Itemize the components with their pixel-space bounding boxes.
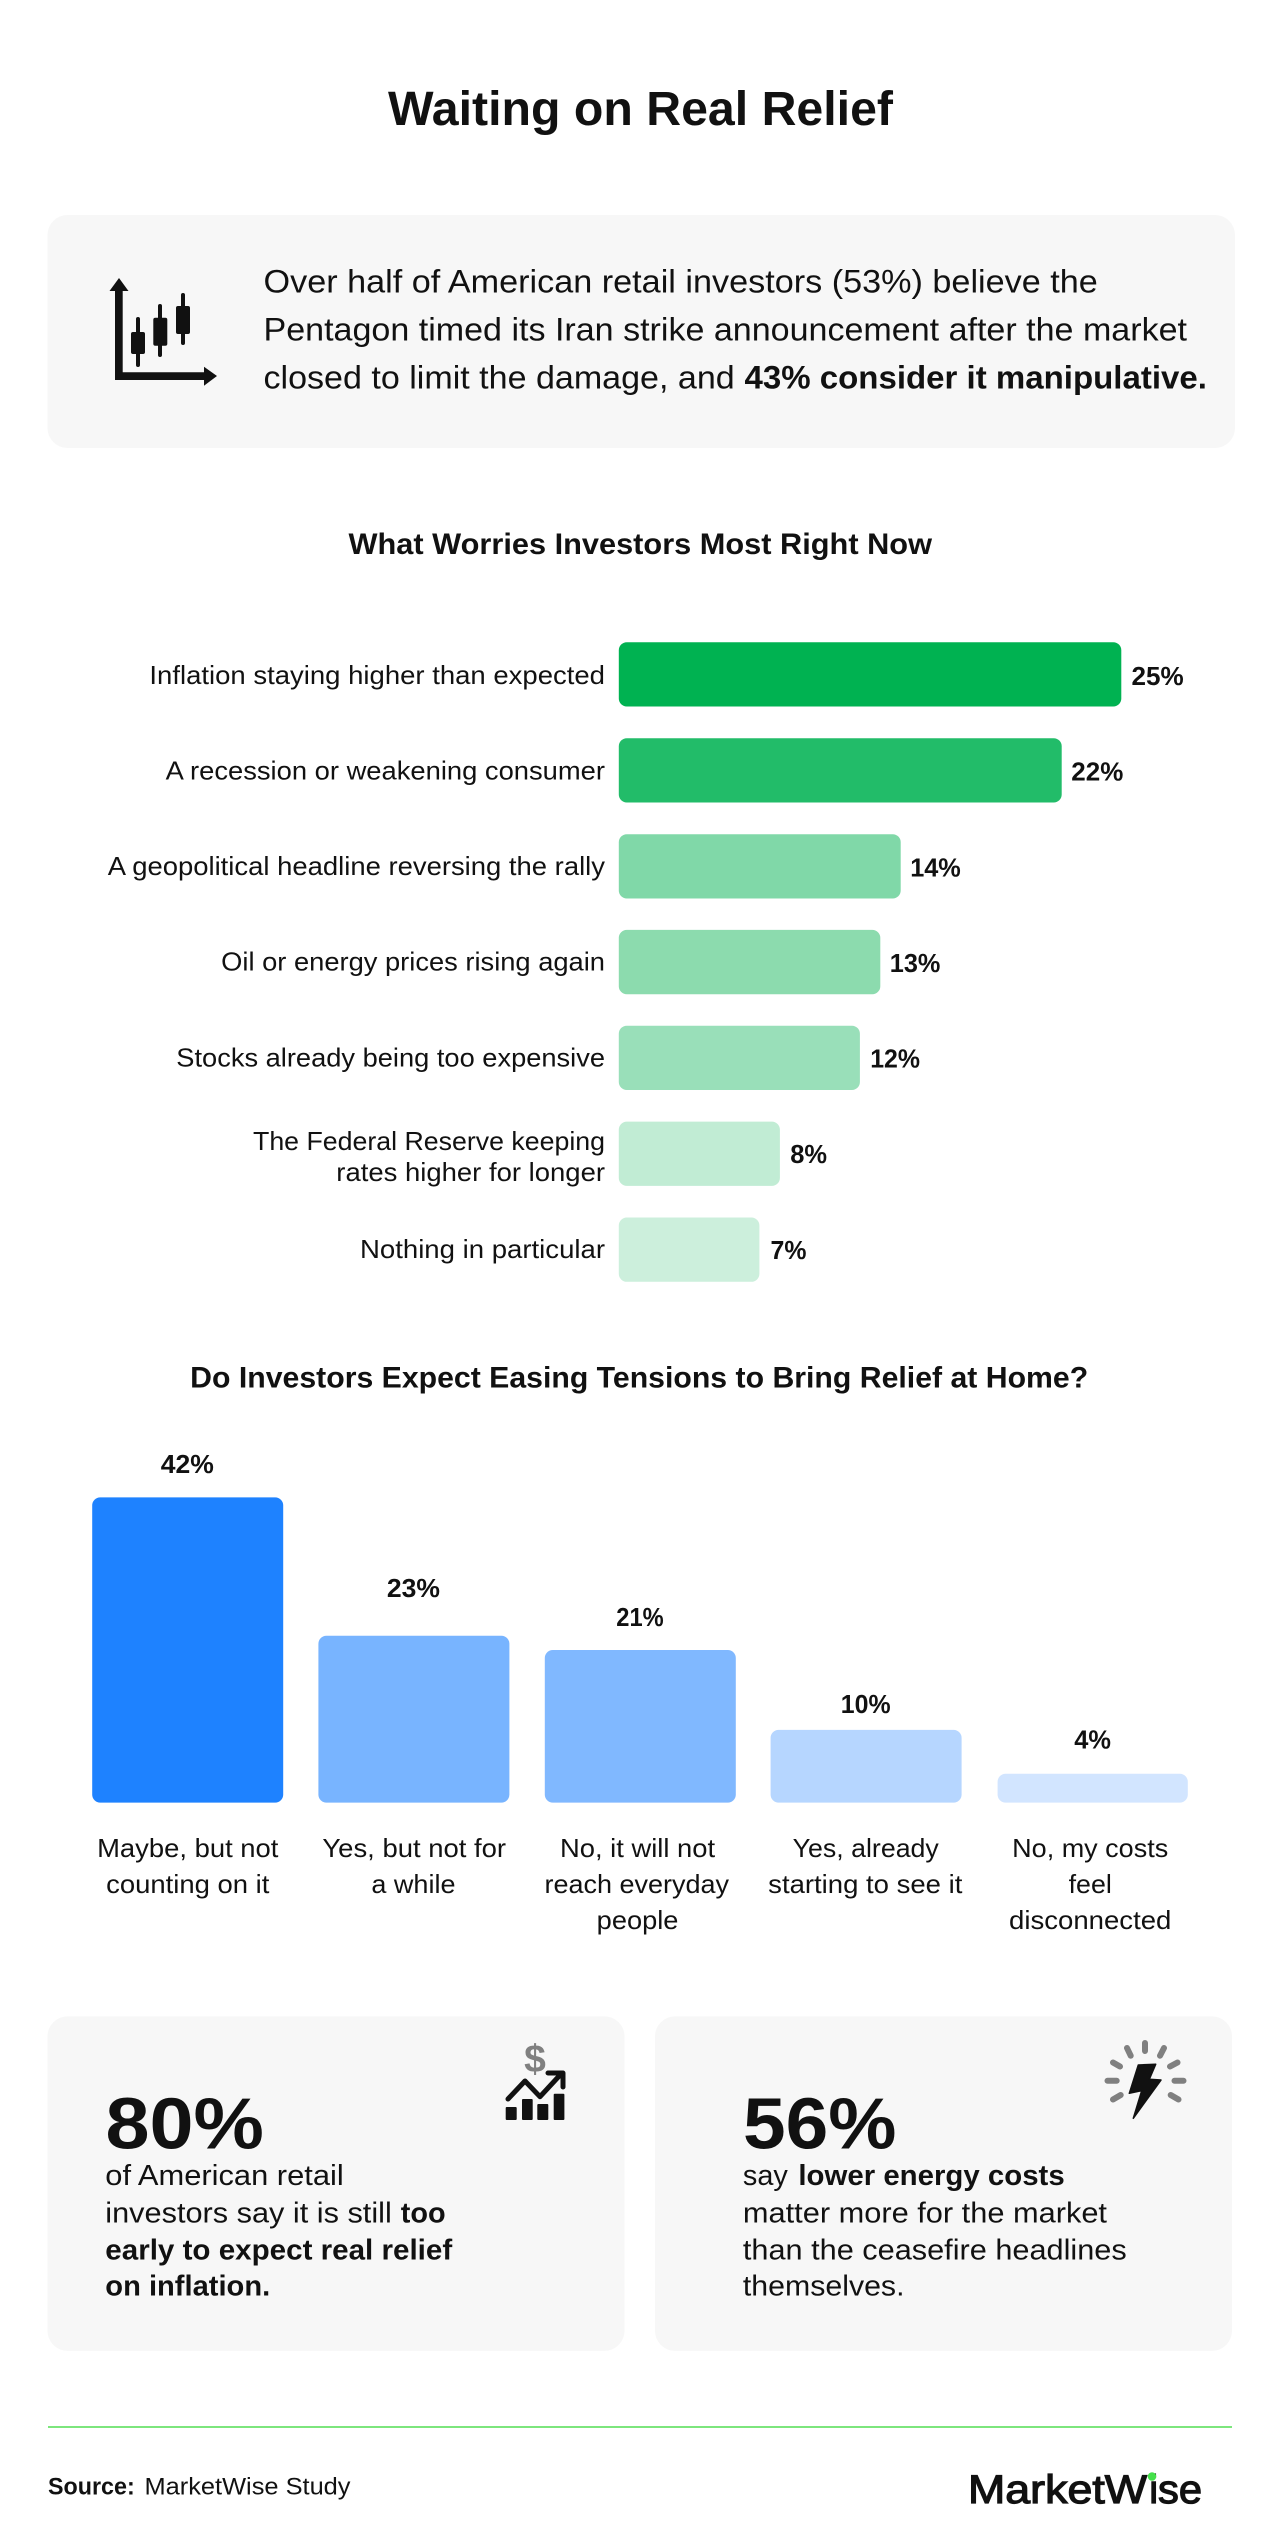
column: no disconnected 4%: feel xyxy=(1069,1869,1112,1899)
column: no 21% xyxy=(544,1602,736,1935)
column: maybe 42%: counting on it xyxy=(106,1869,270,1899)
heading: relief chart: Do Investors Expect Easing Tensions to Bring Relief at Home? xyxy=(190,1361,1088,1394)
source line: Source: xyxy=(48,2474,135,2501)
icon: dollar and rising chart xyxy=(506,2038,564,2120)
bar: inflation 25%: 25% xyxy=(1132,661,1184,691)
stat description: of American retail xyxy=(105,2160,344,2192)
column: yes already 10% xyxy=(768,1689,963,1899)
bar: fed 8%: 8% xyxy=(790,1139,827,1169)
stat: 56%: 56% xyxy=(743,2084,896,2164)
bar: stocks 12%: 12% xyxy=(870,1044,920,1074)
source line xyxy=(48,2474,350,2501)
bar: geopolitical 14%: A geopolitical headline reversing the rally xyxy=(108,851,605,881)
column: yes not for a while 23%: Yes, but not for xyxy=(322,1833,506,1863)
bar: fed 8%: The Federal Reserve keeping xyxy=(253,1126,605,1156)
column: no 21%: reach everyday xyxy=(544,1869,729,1899)
bar: fed 8% xyxy=(253,1122,827,1187)
column: yes already 10%: starting to see it xyxy=(768,1869,963,1899)
bar chart: investor worries xyxy=(108,642,1184,1282)
stat description: too xyxy=(401,2197,446,2229)
bar: geopolitical 14%: 14% xyxy=(910,852,961,882)
panel: 80 percent stat xyxy=(48,2016,624,2351)
column: no disconnected 4%: disconnected xyxy=(1009,1905,1171,1935)
stat description: say xyxy=(743,2160,788,2192)
stat description: than the ceasefire headlines xyxy=(743,2234,1127,2266)
intro text: Over half of American retail investors (53%) believe the xyxy=(264,264,1098,300)
intro text xyxy=(264,264,1207,395)
stat description: investors say it is still xyxy=(105,2197,392,2229)
heading: worries chart: What Worries Investors Most Right Now xyxy=(348,528,933,561)
bar: recession 22%: 22% xyxy=(1071,756,1123,786)
panel: intro statement xyxy=(48,215,1235,448)
title: Waiting on Real Relief xyxy=(388,83,894,136)
column: no 21%: No, it will not xyxy=(560,1833,716,1863)
logo: MarketWise: MarketW xyxy=(968,2468,1147,2512)
stat description: matter more for the market xyxy=(743,2197,1107,2229)
column: no disconnected 4%: 4% xyxy=(1074,1724,1111,1754)
bar: inflation 25%: Inflation staying higher than expected xyxy=(149,660,605,690)
column: no disconnected 4% xyxy=(998,1724,1188,1935)
column: maybe 42%: 42% xyxy=(161,1449,214,1479)
column: yes not for a while 23%: a while xyxy=(371,1869,456,1899)
column chart: relief expectations xyxy=(92,1449,1188,1935)
logo: MarketWise xyxy=(968,2468,1202,2512)
logo: MarketWise: se xyxy=(1158,2468,1202,2512)
bar: recession 22% xyxy=(166,738,1123,802)
icon: dollar and rising chart: $ xyxy=(524,2038,546,2081)
source line: MarketWise Study xyxy=(144,2474,350,2501)
column: no disconnected 4%: No, my costs xyxy=(1012,1833,1168,1863)
column: no 21%: 21% xyxy=(616,1602,664,1632)
bar: inflation 25% xyxy=(149,642,1184,706)
icon: lightning bolt xyxy=(1108,2043,1184,2118)
stat description xyxy=(105,2160,453,2303)
stat description: themselves. xyxy=(743,2271,904,2303)
stat description xyxy=(743,2160,1127,2303)
bar: oil 13%: 13% xyxy=(890,948,940,978)
panel: 56 percent stat xyxy=(655,2016,1232,2351)
bar: recession 22%: A recession or weakening consumer xyxy=(166,755,605,785)
logo: MarketWise: i xyxy=(1149,2468,1158,2512)
bar: nothing 7% xyxy=(360,1218,806,1282)
column: yes not for a while 23% xyxy=(318,1573,509,1899)
divider: green rule xyxy=(48,2426,1232,2428)
column: maybe 42% xyxy=(92,1449,283,1899)
column: maybe 42%: Maybe, but not xyxy=(97,1833,279,1863)
column: no 21%: people xyxy=(597,1905,678,1935)
stat description: lower energy costs xyxy=(798,2160,1065,2192)
stat description: early to expect real relief xyxy=(105,2234,453,2266)
column: yes already 10%: 10% xyxy=(841,1689,891,1719)
stat description: on inflation. xyxy=(105,2271,270,2303)
intro text: Pentagon timed its Iran strike announcement after the market xyxy=(264,312,1187,348)
bar: nothing 7%: 7% xyxy=(770,1235,806,1265)
bar: fed 8%: rates higher for longer xyxy=(336,1157,605,1187)
bar: oil 13%: Oil or energy prices rising again xyxy=(221,946,605,976)
bar: stocks 12%: Stocks already being too expensive xyxy=(176,1042,605,1072)
bar: geopolitical 14% xyxy=(108,834,961,898)
icon: candlestick chart xyxy=(110,278,217,386)
bar: nothing 7%: Nothing in particular xyxy=(360,1234,605,1264)
column: yes already 10%: Yes, already xyxy=(793,1833,939,1863)
bar: oil 13% xyxy=(221,930,940,994)
bar: stocks 12% xyxy=(176,1026,920,1090)
stat: 80%: 80% xyxy=(106,2084,264,2164)
intro text: 43% consider it manipulative. xyxy=(744,359,1207,395)
column: yes not for a while 23%: 23% xyxy=(387,1573,440,1603)
intro text: closed to limit the damage, and xyxy=(264,359,735,395)
